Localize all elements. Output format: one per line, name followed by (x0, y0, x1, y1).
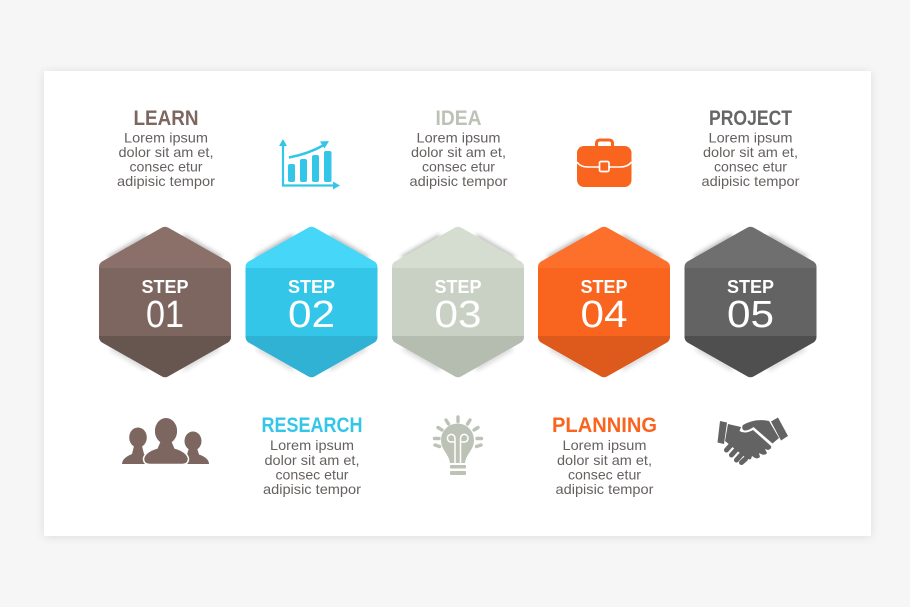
text: planning description: dolor sit am et, (557, 452, 652, 468)
hexagon: step 02 (246, 226, 378, 378)
block: learn (117, 107, 215, 189)
icon: handshake (718, 418, 788, 462)
text: planning description: consec etur (568, 466, 641, 482)
text: project description: Lorem ipsum (708, 130, 792, 146)
block: project (702, 107, 800, 189)
icon: briefcase (577, 140, 632, 187)
icon: light bulb (434, 417, 482, 475)
text: learn description: dolor sit am et, (118, 144, 214, 160)
label: step 02: STEP (288, 277, 335, 297)
icon: people (122, 418, 209, 464)
label: step 03: STEP (434, 277, 482, 297)
text: research description: dolor sit am et, (264, 452, 360, 468)
text: idea description: consec etur (422, 158, 495, 174)
heading: project: PROJECT (709, 107, 792, 130)
label: step 02: 02 (288, 294, 335, 336)
label: step 03 (434, 277, 482, 336)
text: project description: dolor sit am et, (703, 144, 798, 160)
label: step 05: 05 (727, 294, 774, 336)
label: step 01: 01 (146, 294, 184, 336)
text: planning description: adipisic tempor (556, 481, 654, 497)
label: step 01 (142, 277, 188, 336)
text: idea description: adipisic tempor (410, 173, 508, 189)
text: learn description: consec etur (130, 158, 203, 174)
label: step 03: 03 (434, 294, 482, 336)
text: research description: adipisic tempor (263, 481, 361, 497)
label: step 04: 04 (580, 294, 628, 336)
text: research description: consec etur (276, 466, 349, 482)
block: research (262, 414, 362, 497)
label: step 04 (580, 277, 628, 336)
label: step 05 (727, 277, 774, 336)
card panel (44, 71, 871, 537)
text: learn description: Lorem ipsum (124, 130, 208, 146)
text: planning description: Lorem ipsum (562, 437, 646, 453)
hexagon: step 03 (392, 226, 524, 378)
text: idea description: Lorem ipsum (416, 130, 500, 146)
hexagon: step 05 (684, 226, 816, 378)
label: step 04: STEP (580, 277, 628, 297)
label: step 05: STEP (727, 277, 774, 297)
text: project description (702, 130, 800, 189)
block: planning (552, 414, 657, 497)
heading: research: RESEARCH (262, 414, 362, 437)
hexagon: step 01 (99, 226, 231, 378)
text: learn description: adipisic tempor (117, 173, 215, 189)
text: planning description (556, 437, 654, 497)
text: research description (263, 437, 361, 497)
text: idea description (410, 130, 508, 189)
heading: idea: IDEA (436, 107, 482, 130)
label: step 01: STEP (142, 277, 188, 297)
heading: learn: LEARN (134, 107, 198, 130)
text: learn description (117, 130, 215, 189)
label: step 02 (288, 277, 335, 336)
text: idea description: dolor sit am et, (411, 144, 506, 160)
text: research description: Lorem ipsum (270, 437, 354, 453)
block: idea (410, 107, 508, 189)
hexagon: step 04 (538, 226, 670, 378)
icon: bar chart (279, 139, 340, 190)
text: project description: adipisic tempor (702, 173, 800, 189)
text: project description: consec etur (714, 158, 787, 174)
heading: planning: PLANNING (552, 414, 657, 437)
